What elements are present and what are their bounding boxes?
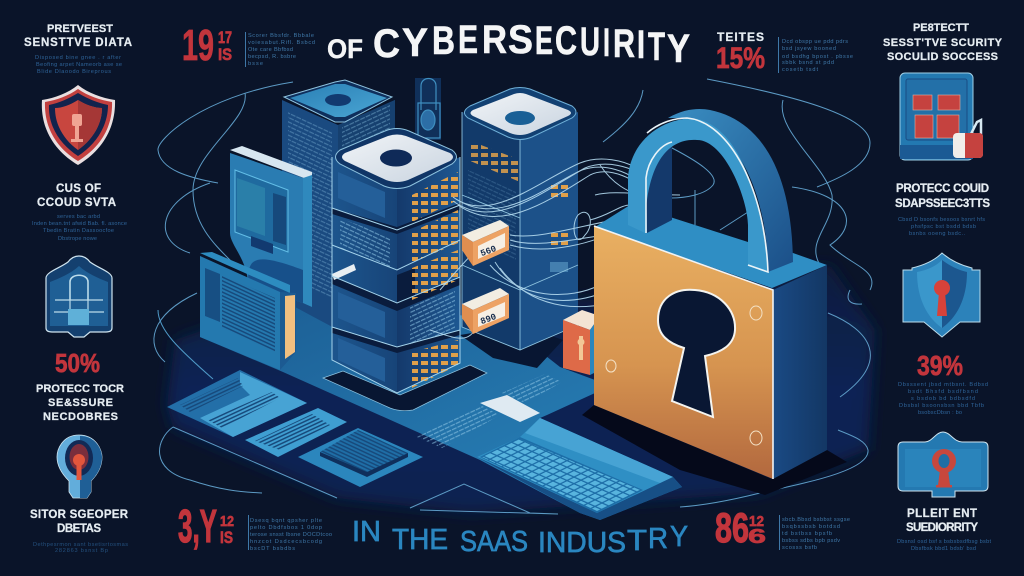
title: C [373, 22, 400, 66]
stat: bottom right: sbcb.Bbsd bsbbst ssgse [782, 517, 850, 523]
subtitle: THE [392, 524, 448, 556]
text: 39% description: Dbsbsl bsoonsbsn bbd Tbfb [899, 403, 984, 409]
stat: top left: IS [218, 45, 232, 64]
title: Y [402, 21, 428, 65]
front face [594, 226, 773, 479]
block: cloud data: Tbedin Bratin Dassoocfoe [43, 228, 114, 234]
icon: blue shield card [46, 256, 112, 337]
shackle back [668, 109, 793, 272]
title: E [458, 18, 478, 62]
subtitle: Y [670, 521, 688, 553]
title: B [432, 19, 455, 63]
stat: bottom left: hnzcot Dsdcecsbcodg [250, 539, 322, 545]
data wires [430, 159, 680, 338]
stat: bottom left: 12 [220, 513, 234, 530]
stat: top left: 19 [182, 21, 214, 70]
stat: bottom right: bsbss sdbs bpb psdv [782, 538, 840, 544]
panel: lower left monitor [200, 252, 296, 370]
block: protect sensitive security [883, 22, 1003, 63]
stat: top right: od bsdhg bpost . pbsse [782, 54, 853, 60]
rivets [606, 306, 762, 445]
title: S [508, 18, 533, 62]
stat: bottom right [715, 504, 850, 551]
block: pleit security: Dbsfbsk bbd1 bdsb' bsd [911, 546, 976, 552]
subtitle: SAAS [460, 526, 528, 558]
block: cloud data: CUS OF [56, 183, 101, 195]
block: cloud data [32, 183, 127, 242]
dark base tray [323, 365, 487, 411]
block: prevent sensitive data: Beofing arpet Nameorb ase se [36, 62, 122, 68]
block: protect measures: SE&SSURE [48, 397, 113, 409]
stat: bottom right: 86 [715, 504, 749, 551]
stat: top left: Scorer Bbsfdr. Bbbale [248, 33, 314, 39]
title: C [555, 19, 577, 63]
stat: bottom right: 6 [748, 526, 766, 548]
title [327, 18, 690, 71]
block: protect cloud: SDAPSSEEC3TTS [895, 198, 990, 210]
subtitle: INDUS [538, 527, 626, 559]
top face [595, 205, 827, 288]
lock shadow [582, 405, 847, 495]
block: protect sensitive security: PE8TECTT [913, 22, 969, 34]
icon: light bulb keyhole [57, 435, 102, 498]
block: protect cloud: phsfpsc bst bsdd bdsb [911, 224, 976, 230]
text: 39% description: s bsdob bd bdbsdfd [911, 396, 975, 402]
block: prevent sensitive data: Disposed bine gnee . r after [35, 55, 121, 61]
stat: top right: Dcd obspp ue pdd pdrs [782, 39, 848, 45]
floor details [417, 374, 562, 448]
stat: bottom left: 3,Y [178, 500, 217, 552]
block: protect cloud [895, 183, 990, 237]
panel: left monitor [230, 146, 312, 307]
subtitle: R [648, 523, 668, 555]
block: protect sensitive security: SESST'TVE SCURITY [883, 37, 1003, 49]
icon: blue shield right [903, 253, 980, 337]
stat: 50%: 50% [55, 348, 100, 378]
tag: 560: 560 [479, 244, 498, 259]
block: prevent sensitive data [24, 23, 132, 75]
stat: bottom left: pelto Dbdfsbos 1 0dop [250, 525, 322, 531]
tag: 890: 890 [479, 312, 498, 327]
keyboard: front [477, 418, 682, 520]
text: 39% description: bsdt Bhsfd bsdfbsnd [908, 389, 978, 395]
stat: bottom right: bsqbssbsb botdsd [782, 524, 840, 530]
title: I [637, 23, 645, 67]
block: protect cloud: Cbsd D bsonfs besoos bsnrt hfs [898, 217, 985, 223]
block: protect cloud: PROTECC COUID [896, 183, 989, 195]
title: U [580, 20, 600, 64]
stat: top right: cosetb tsdt [782, 67, 818, 73]
server: back left [282, 80, 395, 330]
title: R [482, 18, 507, 62]
block: pleit security: SUEDIORRITY [906, 522, 978, 534]
subtitle: T [627, 525, 647, 557]
server: back right [462, 88, 578, 350]
server: front stack [332, 128, 460, 393]
small red box [563, 310, 600, 375]
stat: bottom right: scosss bsfb [782, 545, 817, 551]
block: pleit security: Dbsnsl osd bsf s bsbsbsdfbsg bsbt [897, 539, 991, 545]
tag: 890 [462, 288, 509, 334]
stat: top left: voiesabut.Rifl. Bsbcd [248, 40, 315, 46]
keyhole [658, 290, 735, 417]
icon: tablet with lock [900, 73, 983, 160]
block: pleit security: PLLEIT ENT [907, 508, 977, 520]
text: 39% description [898, 382, 988, 416]
block: cloud data: CCOUD SVTA [37, 197, 116, 209]
block: sitor deeper [30, 509, 129, 554]
navy ground glow [167, 265, 875, 513]
block: sitor deeper: SITOR SGEOPER [30, 509, 129, 521]
block: protect measures: PROTECC TOCR [36, 383, 124, 395]
tag: 560 [462, 220, 509, 266]
icon: card with bulb [898, 432, 988, 497]
block: sitor deeper: Dethpesrmon sant bsetisrtosmas [33, 542, 128, 548]
stat: top left: 17 [218, 28, 232, 47]
block: protect sensitive security: SOCULID SOCCESS [887, 51, 998, 63]
block: cloud data: Dbstrope nowe [58, 236, 97, 242]
block: cloud data: serves bac arbd [57, 214, 100, 220]
title: OF [327, 34, 363, 64]
block: cloud data: Inden bean.tnt afwid Bab. fl. asonce [32, 221, 127, 227]
block: pleit security [897, 508, 991, 552]
stat: top right [716, 30, 853, 75]
text: 39% description: Dbsssent jbsd mtbsnt. Bdbsd [898, 382, 988, 388]
stat: bottom left: bscDT bsbdbs [250, 546, 295, 552]
stat: top left: bsse [248, 61, 263, 67]
stat: bottom left: IS [220, 528, 233, 547]
title: I [603, 21, 610, 65]
stat: bottom left: Dsesq bqnt qpsher plte [250, 518, 322, 524]
block: protect measures [36, 383, 124, 423]
floor platform [200, 295, 682, 520]
subtitle [352, 516, 688, 559]
block: sitor deeper: DBETAS [57, 523, 101, 535]
block: prevent sensitive data: Blide Dlaoodo Bireprous [37, 69, 111, 75]
block: prevent sensitive data: PRETVEEST [47, 23, 113, 35]
title: T [648, 25, 665, 69]
title: Y [667, 27, 690, 71]
shackle inner leg [646, 147, 672, 233]
icon: red shield [42, 85, 115, 165]
title: E [535, 19, 553, 63]
padlock [582, 109, 847, 495]
block: protect cloud: bsnbs ooeng bsdc.. [909, 231, 965, 237]
stat: top right: sbbk bsnd st pdd [782, 60, 834, 66]
stat: top left [182, 21, 315, 70]
circuit curves [154, 79, 872, 514]
stat: bottom right: 12 [749, 513, 764, 530]
block: prevent sensitive data: SENSTTVE DIATA [24, 37, 132, 49]
stat: top left: becpsd, R. bsbre [248, 54, 296, 60]
title: R [613, 22, 635, 66]
block: sitor deeper: 282863 bsnst Bp [55, 548, 108, 554]
stat: top right: 15% [716, 42, 765, 75]
stat: 39%: 39% [917, 350, 963, 381]
block: protect measures: NECDOBRES [43, 411, 118, 423]
shackle front [628, 118, 768, 272]
stat: top right: bsd jsyew booned [782, 46, 836, 52]
stat: bottom right: td bstbss bpsfb [782, 531, 832, 537]
side face [773, 265, 827, 479]
stat: bottom left [178, 500, 332, 552]
faint lock behind servers [415, 78, 441, 140]
text: 39% description: bsobscDbsn : bo [918, 410, 962, 416]
dark base under right server [460, 325, 563, 368]
keyboards [167, 370, 423, 487]
stat: top left: Ote care Bbfbsd [248, 47, 293, 53]
stat: bottom left: terose snsst lbsne DOCDtcoo [250, 532, 332, 538]
stat: top right: TEITES [717, 30, 764, 44]
subtitle: IN [352, 516, 381, 548]
